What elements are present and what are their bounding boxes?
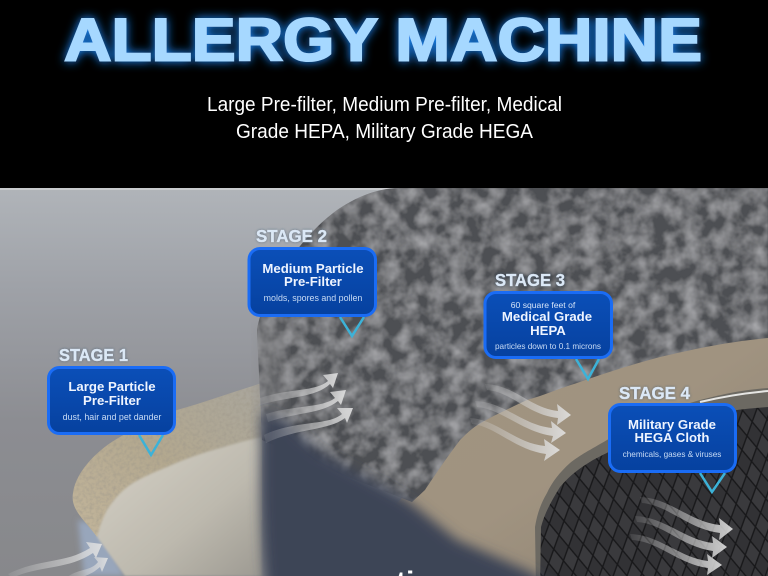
stage 3 text: 60 square feet of	[511, 300, 576, 310]
stage 1 pointer	[139, 435, 163, 455]
photo: stage 1 white felt	[97, 437, 262, 576]
stage 3 label: STAGE 3	[495, 270, 565, 290]
arrows: stage 3	[470, 384, 571, 461]
stage 4 text: chemicals, gases & viruses	[623, 450, 721, 459]
stage 1 text	[63, 379, 161, 422]
stage 2 text: Pre-Filter	[284, 274, 342, 289]
stage 4 pointer	[700, 473, 725, 492]
arrows: stage 2	[260, 373, 353, 443]
photo: filter cutaway scene	[0, 188, 768, 576]
stage 2 text: Medium Particle	[262, 261, 364, 276]
photo: stage 1 outer band	[78, 520, 125, 576]
stage 2 text: molds, spores and pollen	[264, 293, 362, 303]
stage 4 text	[623, 417, 721, 459]
stage 3 pointer	[576, 359, 599, 379]
stage 2 text	[262, 261, 364, 303]
stage 4 box	[610, 404, 736, 472]
stage 3 text: particles down to 0.1 microns	[495, 342, 601, 351]
stage 2 box	[249, 248, 376, 316]
callout: stage 1	[48, 345, 174, 455]
photo: tan HEPA shell	[380, 336, 768, 576]
photo: blurred dark foreground felt	[261, 412, 575, 576]
photo: felt lighter left edge	[258, 324, 287, 418]
arrows: stage 1	[8, 542, 108, 576]
title: ALLERGY MACHINE	[64, 6, 702, 74]
stage 1 text: Large Particle	[68, 379, 156, 394]
stage 4 text: HEGA Cloth	[635, 430, 709, 445]
photo: stage 2 grey felt	[257, 188, 768, 502]
stage 3 box	[485, 292, 612, 358]
subtitle: Grade HEPA, Military Grade HEGA	[236, 121, 534, 143]
photo: stage 1 beige ring	[73, 383, 262, 537]
stage 4 label: STAGE 4	[619, 383, 690, 403]
stage 1 box	[48, 368, 174, 434]
stage 2 pointer	[340, 317, 364, 336]
subtitle	[207, 94, 562, 143]
black header background	[0, 0, 768, 188]
subtitle: Large Pre-filter, Medium Pre-filter, Medical	[207, 94, 562, 116]
stage 1 label: STAGE 1	[59, 345, 128, 365]
stage 2 label: STAGE 2	[256, 226, 327, 246]
stage 1 text: dust, hair and pet dander	[63, 412, 161, 422]
stage 3 text: Medical Grade	[502, 309, 592, 324]
arrows: stage 4	[630, 497, 733, 575]
photo: metal ring and mesh	[535, 388, 768, 576]
photo: ring highlight	[700, 391, 768, 402]
photo: activated carbon mesh	[540, 407, 768, 576]
stage 3 text	[495, 300, 601, 351]
stage 1 text: Pre-Filter	[83, 393, 141, 408]
callout: stage 2	[249, 226, 376, 336]
stage 3 text: HEPA	[530, 323, 566, 338]
callout: stage 4	[610, 383, 736, 492]
callout: stage 3	[485, 270, 612, 379]
stage 4 text: Military Grade	[628, 417, 716, 432]
